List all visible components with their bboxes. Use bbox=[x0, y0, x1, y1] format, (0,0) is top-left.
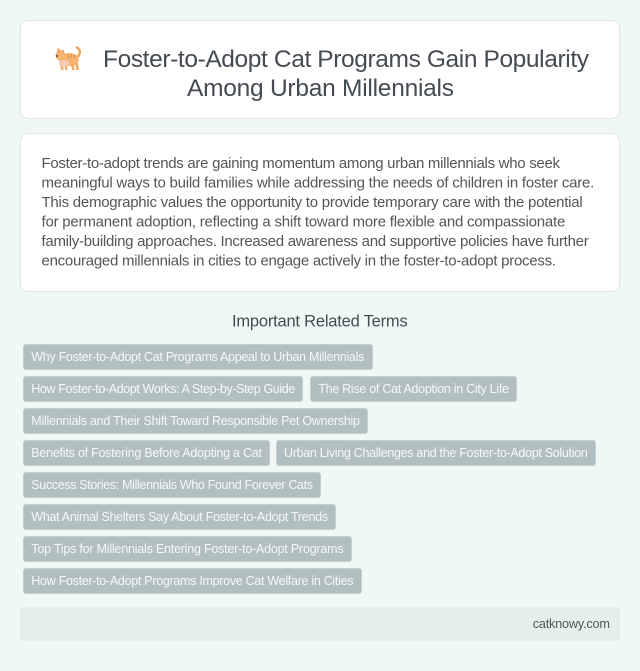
text block: summary paragraph bbox=[42, 155, 594, 270]
heading: important related terms: Important Related Terms bbox=[232, 312, 408, 330]
tag: rise of cat adoption: The Rise of Cat Adoption in City Life bbox=[318, 382, 509, 396]
tag: cat welfare bbox=[24, 568, 362, 594]
tag: cat welfare: How Foster-to-Adopt Programs Improve Cat Welfare in Cities bbox=[31, 574, 354, 588]
tag: success stories: Success Stories: Millennials Who Found Forever Cats bbox=[31, 478, 313, 492]
tag: how it works bbox=[24, 376, 302, 402]
tag list: related terms bbox=[24, 344, 596, 594]
tag: animal shelters: What Animal Shelters Say About Foster-to-Adopt Trends bbox=[31, 510, 328, 524]
icon: orange cat bbox=[56, 48, 80, 70]
text block: summary paragraph: meaningful ways to build families while addressing the needs of children in foster care. bbox=[42, 174, 594, 192]
text block: summary paragraph: for permanent adoption, reflecting a shift toward more flexible and compassionate bbox=[42, 214, 565, 231]
footer: site name: catknowy.com bbox=[533, 617, 610, 631]
tag: top tips: Top Tips for Millennials Entering Foster-to-Adopt Programs bbox=[31, 542, 344, 556]
text block: summary paragraph: family-building approaches. Increased awareness and supportive policies have further bbox=[42, 233, 589, 250]
tag: benefits of fostering: Benefits of Fostering Before Adopting a Cat bbox=[31, 446, 263, 460]
tag: responsible pet ownership: Millennials and Their Shift Toward Responsible Pet Ownership bbox=[31, 414, 360, 428]
tag: responsible pet ownership bbox=[24, 408, 368, 434]
panel: title card bbox=[20, 20, 620, 118]
tag: how it works: How Foster-to-Adopt Works: A Step-by-Step Guide bbox=[31, 382, 295, 396]
tag: benefits of fostering bbox=[24, 440, 270, 466]
tag: success stories bbox=[24, 472, 320, 498]
tag: top tips bbox=[24, 536, 352, 562]
tag: urban living challenges bbox=[276, 440, 596, 466]
text block: summary paragraph: encouraged millennials in cities to engage actively in the foster-to-adopt process. bbox=[42, 252, 556, 270]
tag: urban living challenges: Urban Living Challenges and the Foster-to-Adopt Solution bbox=[284, 446, 588, 460]
heading: title: Foster-to-Adopt Cat Programs Gain Popularity bbox=[103, 46, 590, 73]
tag: why programs appeal: Why Foster-to-Adopt Cat Programs Appeal to Urban Millennials bbox=[31, 350, 364, 364]
footer bar bbox=[20, 607, 620, 641]
tag: animal shelters bbox=[24, 504, 336, 530]
text block: summary paragraph: Foster-to-adopt trends are gaining momentum among urban millennials who seek bbox=[42, 155, 560, 172]
panel: summary text bbox=[20, 134, 620, 292]
tag: why programs appeal bbox=[24, 344, 372, 370]
heading: title bbox=[103, 46, 590, 102]
text block: summary paragraph: This demographic values the opportunity to provide temporary care with the potential bbox=[42, 194, 583, 211]
tag: rise of cat adoption bbox=[310, 376, 516, 402]
heading: title: Among Urban Millennials bbox=[187, 75, 454, 102]
